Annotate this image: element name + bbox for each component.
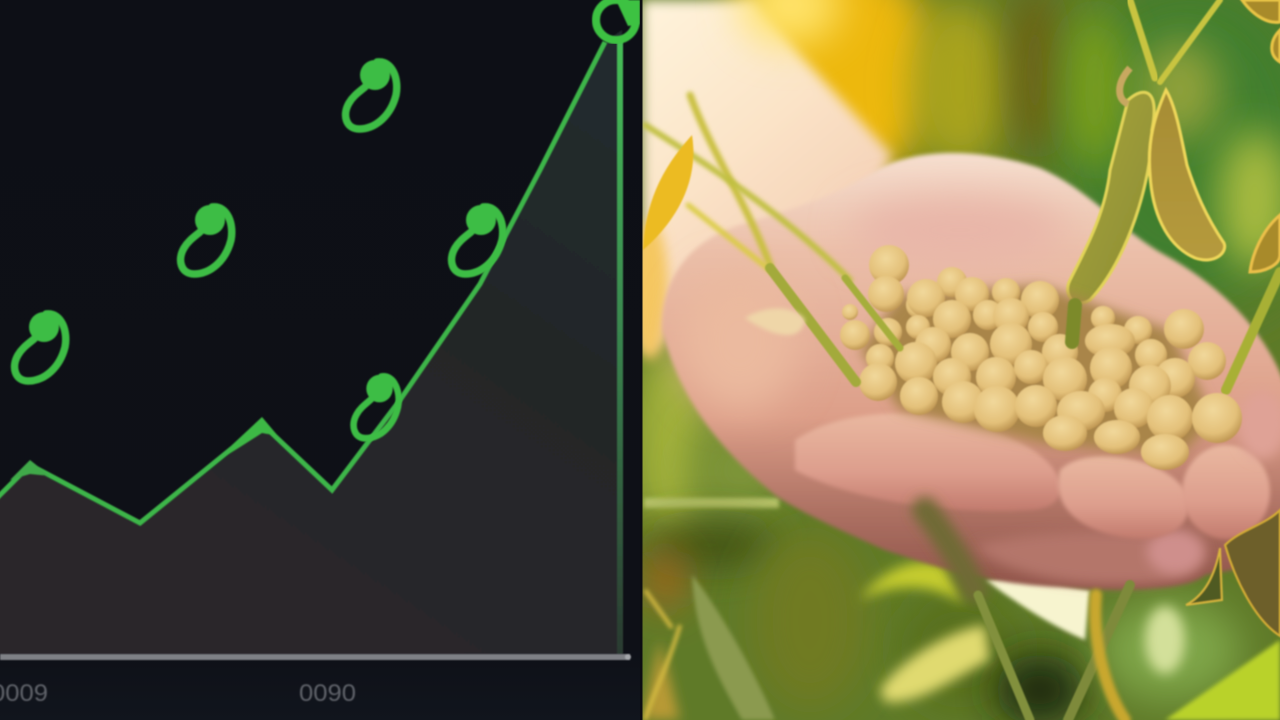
chaff highlight on palm	[745, 308, 805, 335]
icon: soybean 2	[181, 205, 232, 274]
icon: soybean 4	[452, 205, 503, 274]
pods	[643, 0, 1280, 636]
divider between panels	[640, 0, 642, 720]
panel: photo of soybeans in hand	[630, 0, 1280, 720]
palm shading	[860, 184, 1060, 249]
icon: soybean 3	[346, 60, 397, 129]
area under the line	[0, 30, 622, 654]
finger: lower	[975, 532, 1206, 585]
finger: ring	[1182, 445, 1270, 539]
finger: index	[795, 413, 1061, 511]
left glow on wrist	[632, 220, 668, 360]
icon: soybean at peak	[596, 0, 640, 40]
icon: soybean 5	[354, 375, 399, 438]
axis label center: 0090	[299, 680, 356, 707]
finger: middle	[1058, 456, 1189, 539]
photo background field	[630, 0, 1280, 720]
stems over beans	[770, 268, 1075, 382]
panel: line chart	[0, 0, 642, 720]
palm	[662, 153, 1280, 589]
chart background	[0, 0, 642, 720]
right edge of palm	[1238, 391, 1280, 459]
forearm	[642, 0, 892, 350]
hand	[662, 153, 1280, 589]
vertical marker line	[617, 40, 623, 654]
icon: soybean 1	[15, 312, 66, 381]
thenar highlight	[658, 322, 795, 424]
growth line	[0, 42, 605, 523]
sun glow	[740, 0, 840, 45]
stems	[645, 0, 1280, 720]
x axis	[0, 654, 631, 660]
soybean pile	[840, 245, 1242, 470]
